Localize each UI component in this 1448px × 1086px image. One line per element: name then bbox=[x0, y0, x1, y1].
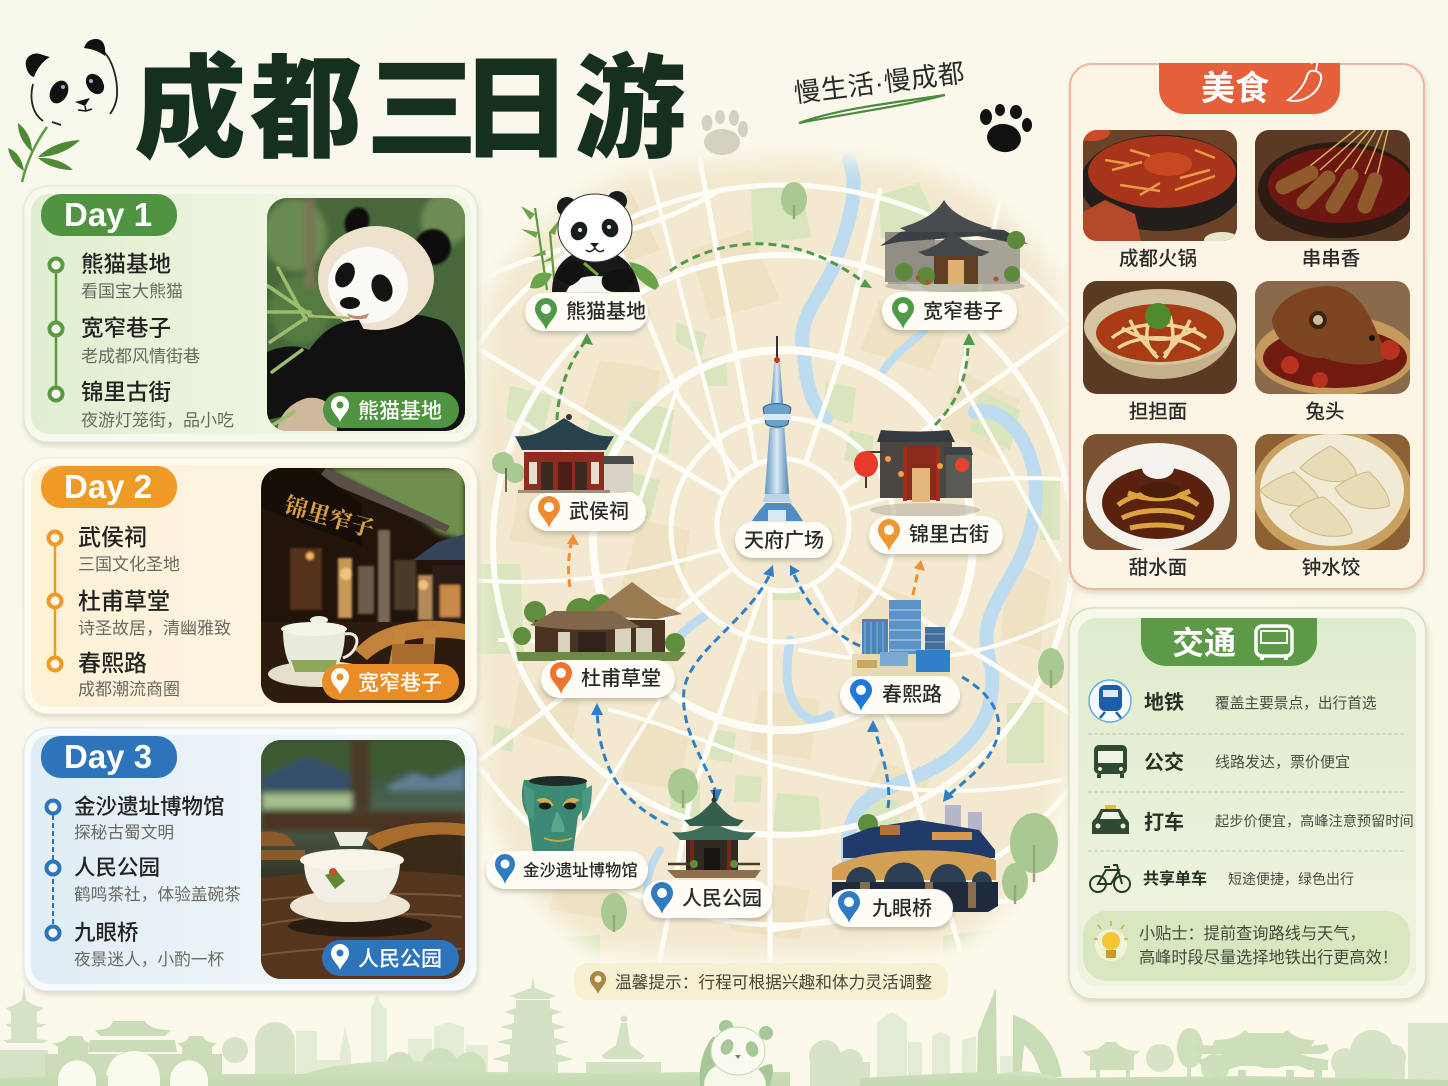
label: jiuyan bridge: 九眼桥 bbox=[872, 897, 932, 920]
panel: day 1 bbox=[24, 186, 477, 442]
photo: teahouse with gaiwan: 锦里窄子 bbox=[281, 487, 379, 544]
label: dufu cottage: 杜甫草堂 bbox=[581, 667, 661, 690]
food heading tab: 美食 bbox=[1201, 70, 1269, 108]
label: jinsha museum bbox=[486, 851, 648, 889]
callout: travel tip: 小贴士：提前查询路线与天气， bbox=[1139, 925, 1366, 943]
icon: tianfu tv tower bbox=[752, 336, 803, 521]
day 2 stops: 杜甫草堂 bbox=[78, 588, 170, 614]
orange route bbox=[569, 540, 919, 595]
day 3 stops: 金沙遗址博物馆 bbox=[74, 795, 225, 819]
icon: panda head bbox=[26, 39, 117, 125]
day 2 timeline bbox=[48, 532, 62, 670]
day 2 stops: 春熙路 bbox=[78, 650, 147, 676]
day 1 stops: 夜游灯笼街，品小吃 bbox=[81, 411, 234, 430]
skyline panda bbox=[700, 1020, 773, 1086]
icon: grey paw bbox=[702, 110, 748, 155]
photo: sweet water noodles bbox=[1083, 434, 1237, 551]
label: jinsha museum: 金沙遗址博物馆 bbox=[523, 861, 638, 880]
icon: kuanzhai alley building bbox=[880, 200, 1028, 292]
label: dan dan noodles: 担担面 bbox=[1129, 401, 1187, 423]
skyline: ground band bbox=[0, 1061, 1448, 1086]
label: wuhou shrine: 武侯祠 bbox=[569, 500, 629, 523]
label: chuan chuan: 串串香 bbox=[1302, 248, 1360, 270]
label: dufu cottage bbox=[541, 660, 675, 698]
row: bus bbox=[1094, 745, 1350, 778]
label: sweet water noodles: 甜水面 bbox=[1129, 557, 1187, 579]
label: kuanzhai alley: 宽窄巷子 bbox=[923, 299, 1003, 323]
label: people's park bbox=[643, 880, 772, 918]
skyline: right block bbox=[1408, 1023, 1448, 1086]
day 1 timeline bbox=[50, 258, 62, 400]
icon: jinsha bronze mask bbox=[522, 776, 592, 870]
blue route bbox=[597, 572, 999, 825]
title: 成都三日游 bbox=[134, 19, 686, 181]
row: metro bbox=[1089, 680, 1377, 722]
photo tag: kuanzhai alley bbox=[322, 664, 459, 700]
photo: zhong dumplings bbox=[1255, 434, 1410, 550]
day 2 badge bbox=[41, 466, 177, 508]
label: tianfu square: 天府广场 bbox=[744, 529, 824, 552]
day 2 badge: Day 2 bbox=[64, 468, 152, 505]
photo: dan dan noodles bbox=[1083, 281, 1237, 394]
photo tag: kuanzhai alley: 宽窄巷子 bbox=[358, 671, 442, 695]
row: taxi: 起步价便宜，高峰注意预留时间 bbox=[1215, 813, 1414, 830]
day 3 badge bbox=[41, 736, 177, 778]
photo: chengdu hotpot bbox=[1083, 130, 1237, 241]
callout: travel note: 温馨提示：行程可根据兴趣和体力灵活调整 bbox=[615, 973, 932, 992]
label: tianfu square bbox=[735, 522, 832, 558]
map trees bbox=[601, 182, 1064, 932]
row: metro: 覆盖主要景点，出行首选 bbox=[1215, 695, 1377, 712]
transport heading tab: 交通 bbox=[1172, 625, 1236, 661]
food heading tab bbox=[1159, 59, 1340, 114]
day 1 stops: 看国宝大熊猫 bbox=[81, 282, 183, 301]
day 3 stops: 鹤鸣茶社，体验盖碗茶 bbox=[74, 885, 241, 904]
row: metro: 地铁 bbox=[1144, 691, 1184, 714]
row: taxi: 打车 bbox=[1144, 810, 1184, 834]
skyline: big memorial gate bbox=[1194, 1030, 1329, 1082]
day 2 stops: 诗圣故居，清幽雅致 bbox=[78, 619, 231, 638]
label: jiuyan bridge bbox=[829, 889, 953, 927]
photo: teahouse with gaiwan bbox=[261, 468, 465, 703]
panel: food bbox=[1070, 59, 1424, 589]
label: jinli street: 锦里古街 bbox=[909, 523, 989, 546]
day 3 stops: 九眼桥 bbox=[74, 921, 139, 945]
skyline: centre pagoda and statue bbox=[492, 976, 661, 1076]
icon: jiuyan bridge bbox=[832, 805, 998, 912]
slogan brush stroke bbox=[799, 95, 945, 123]
river bbox=[647, 160, 1036, 900]
skyline: pale towers bbox=[296, 995, 1014, 1086]
day 3 stops: 人民公园 bbox=[74, 856, 160, 880]
photo: gaiwan in people's park bbox=[261, 740, 465, 979]
day 3 stops: 探秘古蜀文明 bbox=[74, 823, 174, 842]
icon: giant panda illustration bbox=[521, 191, 659, 292]
row: shared bike: 共享单车 bbox=[1143, 869, 1207, 888]
label: zhong dumplings: 钟水饺 bbox=[1302, 557, 1361, 579]
photo: giant panda eating bamboo bbox=[263, 194, 469, 440]
city map background bbox=[473, 153, 1076, 962]
day 1 badge bbox=[41, 194, 177, 236]
arrowheads bbox=[567, 279, 975, 802]
row: shared bike bbox=[1090, 865, 1354, 892]
day 1 stops: 宽窄巷子 bbox=[81, 316, 171, 341]
route arrows bbox=[557, 244, 999, 825]
icon: jinli gate bbox=[854, 430, 980, 517]
label: chengdu hotpot: 成都火锅 bbox=[1119, 248, 1197, 270]
icon: bamboo bbox=[8, 123, 80, 182]
photo tag: people's park: 人民公园 bbox=[358, 948, 442, 971]
photo tag: people's park bbox=[322, 940, 459, 976]
skyline: glass towers bbox=[977, 988, 1066, 1082]
map label pins bbox=[486, 292, 1017, 927]
label: chunxi road: 春熙路 bbox=[882, 683, 942, 706]
day 2 stops: 成都潮流商圈 bbox=[78, 680, 180, 699]
icon: wuhou shrine bbox=[492, 414, 634, 493]
icon: black paw bbox=[980, 104, 1032, 155]
photo: rabbit head bbox=[1255, 281, 1415, 395]
row: bus: 线路发达，票价便宜 bbox=[1215, 754, 1350, 771]
label: chunxi road bbox=[840, 676, 960, 714]
label: panda base bbox=[525, 293, 648, 331]
callout: travel tip bbox=[1083, 911, 1410, 981]
day 3 badge: Day 3 bbox=[64, 738, 152, 775]
panel: day 3 bbox=[24, 728, 477, 991]
label: panda base: 熊猫基地 bbox=[566, 300, 646, 323]
day 2 stops: 武侯祠 bbox=[78, 524, 147, 550]
skyline arches highlight bbox=[58, 1051, 208, 1086]
row: bus: 公交 bbox=[1144, 750, 1184, 774]
day 3 timeline bbox=[46, 800, 60, 940]
label: jinli street bbox=[869, 516, 1003, 554]
callout: travel tip: 高峰时段尽量选择地铁出行更高效！ bbox=[1139, 949, 1398, 967]
transport heading tab bbox=[1141, 618, 1317, 666]
city skyline footer bbox=[0, 976, 1448, 1086]
slogan: 慢生活·慢成都 bbox=[792, 58, 967, 108]
panel: day 2 bbox=[24, 458, 477, 714]
skyline: left pagoda bbox=[0, 986, 48, 1086]
label: rabbit head: 兔头 bbox=[1305, 401, 1345, 423]
photo tag: panda base: 熊猫基地 bbox=[358, 400, 442, 423]
icon: dufu thatched cottage bbox=[513, 582, 686, 661]
skyline: right pavilion bbox=[1082, 1042, 1140, 1080]
skyline: arched gate bbox=[45, 1021, 222, 1086]
row: shared bike: 短途便捷，绿色出行 bbox=[1228, 871, 1354, 887]
day 2 stops bbox=[78, 524, 231, 699]
label: people's park: 人民公园 bbox=[682, 887, 762, 910]
day 3 stops: 夜景迷人，小酌一杯 bbox=[74, 950, 224, 969]
day 2 stops: 三国文化圣地 bbox=[78, 555, 180, 574]
day 3 stops bbox=[74, 795, 241, 969]
day 1 stops: 老成都风情街巷 bbox=[81, 347, 200, 366]
icon: chunxi road towers bbox=[852, 600, 950, 676]
roads bbox=[478, 158, 1074, 962]
label: wuhou shrine bbox=[529, 493, 646, 531]
day 1 stops: 熊猫基地 bbox=[81, 252, 171, 277]
label: kuanzhai alley bbox=[882, 292, 1017, 330]
day 1 badge: Day 1 bbox=[64, 196, 152, 233]
photo tag: panda base bbox=[323, 392, 459, 428]
skyline: trees bbox=[222, 1022, 1406, 1086]
icon: people's park pavilion bbox=[667, 790, 761, 878]
callout: travel note bbox=[574, 963, 948, 1000]
day 1 stops bbox=[81, 252, 234, 430]
green route bbox=[557, 244, 968, 425]
row: taxi bbox=[1092, 805, 1414, 834]
day 1 stops: 锦里古街 bbox=[81, 380, 171, 405]
panel: transport bbox=[1069, 608, 1426, 999]
photo: chuan chuan skewers bbox=[1255, 130, 1418, 241]
